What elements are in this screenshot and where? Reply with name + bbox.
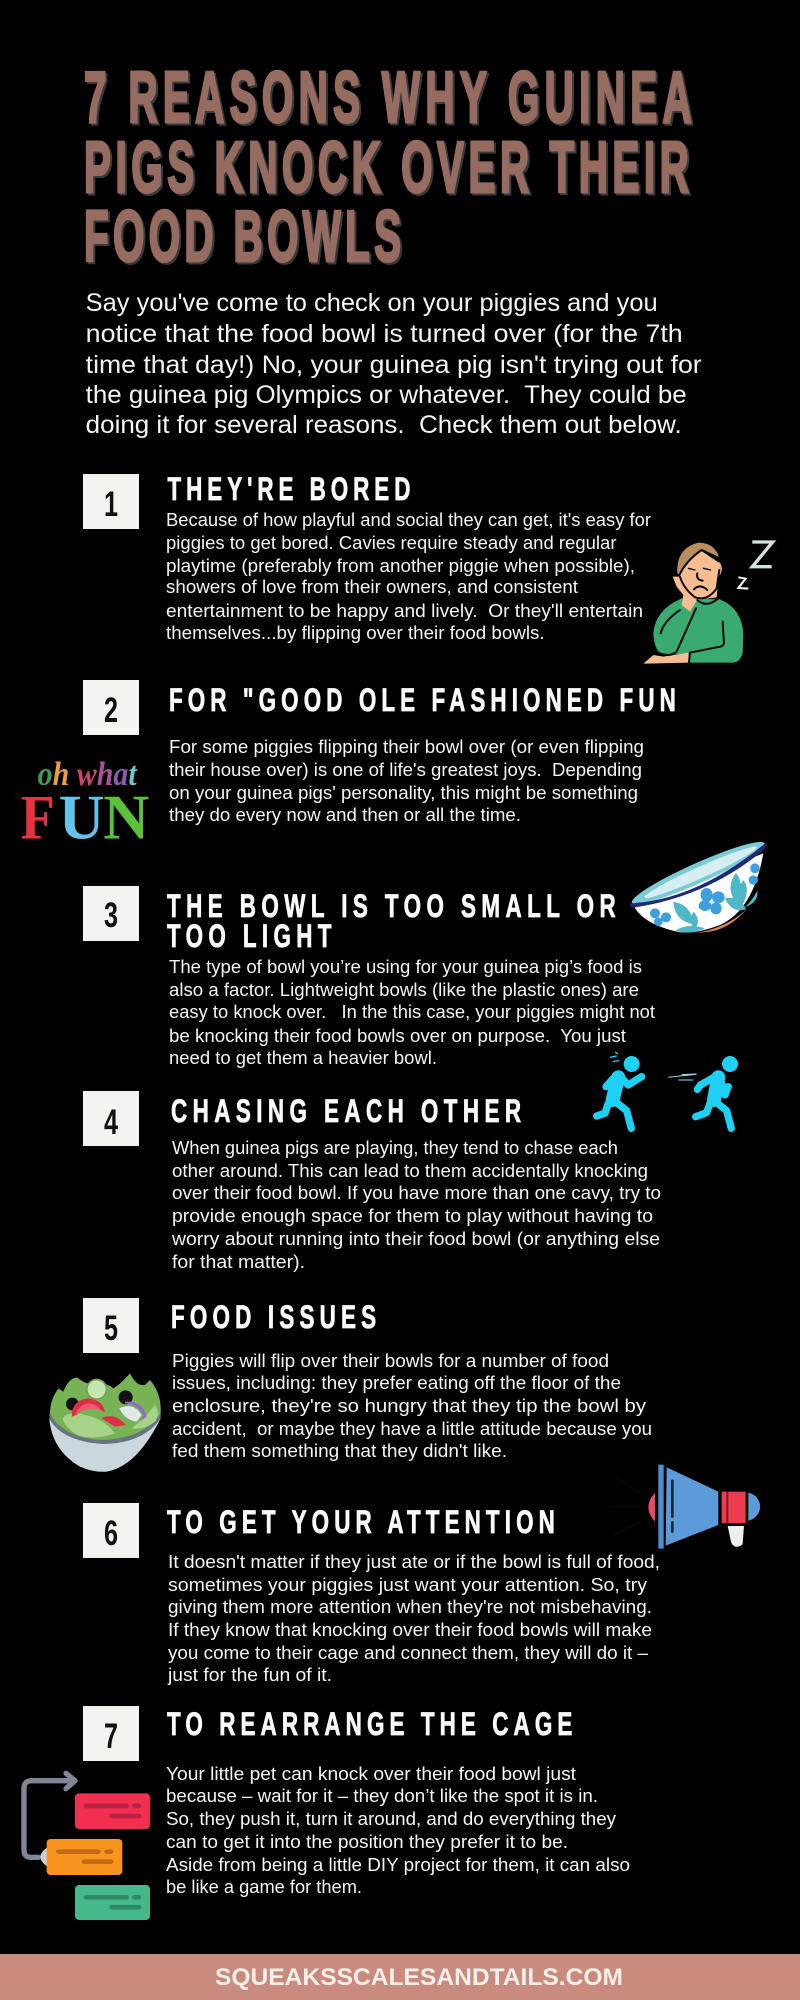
body text 6: If they know that knocking over their food bowls will make — [168, 1619, 652, 1640]
panel: reason 3 — [83, 834, 769, 1068]
panel: reason 7 — [24, 1706, 630, 1920]
number badge 4 — [83, 1091, 139, 1146]
number badge 1: 1 — [104, 485, 118, 524]
icon: oh what fun lettering: U — [59, 782, 105, 852]
body text 6: sometimes your piggies just want your attention. So, try — [168, 1574, 648, 1595]
body text 7: Your little pet can knock over their food bowl just — [166, 1763, 576, 1784]
icon: bored man — [643, 542, 773, 664]
body text 5 — [172, 1350, 652, 1461]
body text 6: It doesn't matter if they just ate or if the bowl is full of food, — [168, 1551, 660, 1572]
number badge 5: 5 — [104, 1309, 118, 1348]
panel: reason 4 — [83, 1052, 738, 1272]
intro text — [86, 289, 702, 439]
icon: salad bowl — [49, 1373, 161, 1472]
panel: reason 1 — [83, 471, 773, 664]
body text 4: worry about running into their food bowl (or anything else — [171, 1228, 660, 1249]
body text 5: fed them something that they didn't like. — [172, 1440, 507, 1461]
body text 7: can to get it into the position they prefer it to be. — [166, 1831, 568, 1852]
body text 3: easy to knock over. In the this case, your piggies might not — [169, 1001, 655, 1022]
number badge 7 — [83, 1706, 139, 1761]
title: PIGS KNOCK OVER THEIR — [84, 128, 689, 208]
title: FOOD BOWLS — [84, 197, 401, 277]
body text 5: Piggies will flip over their bowls for a number of food — [172, 1350, 609, 1371]
body text 1: piggies to get bored. Cavies require steady and regular — [166, 532, 616, 553]
number badge 2: 2 — [104, 691, 118, 730]
body text 1: Because of how playful and social they can get, it's easy for — [166, 509, 651, 530]
panel: reason 6 — [83, 1465, 760, 1685]
body text 3 — [169, 956, 655, 1068]
body text 6: just for the fun of it. — [167, 1664, 332, 1685]
intro text: doing it for several reasons. Check them out below. — [86, 411, 682, 439]
number badge 6: 6 — [104, 1514, 118, 1553]
body text 1: playtime (preferably from another piggie when possible), — [166, 555, 635, 576]
heading 4: CHASING EACH OTHER — [171, 1093, 521, 1129]
intro text: the guinea pig Olympics or whatever. They could be — [86, 381, 687, 409]
intro text: notice that the food bowl is turned over (for the 7th — [86, 320, 683, 348]
body text 7: So, they push it, turn it around, and do everything they — [166, 1808, 617, 1829]
icon: oh what fun lettering — [21, 756, 149, 852]
body text 4: provide enough space for them to play without having to — [172, 1205, 653, 1226]
icon: tilted patterned bowl — [628, 834, 769, 933]
body text 3: also a factor. Lightweight bowls (like the plastic ones) are — [169, 979, 639, 1000]
body text 1: themselves...by flipping over their food bowls. — [166, 622, 545, 643]
body text 7: because – wait for it – they don’t like the spot it is in. — [166, 1785, 598, 1806]
intro text: time that day!) No, your guinea pig isn't trying out for — [86, 351, 702, 379]
body text 4 — [171, 1137, 661, 1272]
body text 3: be knocking their food bowls over on purpose. You just — [169, 1025, 626, 1046]
heading 5: FOOD ISSUES — [171, 1299, 376, 1335]
body text 7 — [166, 1763, 630, 1897]
body text 2: on your guinea pigs' personality, this might be something — [169, 782, 638, 803]
number badge 4: 4 — [104, 1103, 118, 1142]
icon: oh what fun lettering: N — [103, 782, 149, 852]
body text 4: over their food bowl. If you have more than one cavy, try to — [172, 1182, 661, 1203]
body text 2: they do every now and then or all the time. — [169, 804, 521, 825]
icon: oh what fun lettering: F — [21, 782, 55, 852]
body text 5: accident, or maybe they have a little attitude because you — [172, 1418, 652, 1439]
number badge 6 — [83, 1503, 139, 1558]
icon: megaphone — [610, 1465, 760, 1549]
heading 2: FOR "GOOD OLE FASHIONED FUN — [169, 682, 676, 718]
body text 5: issues, including: they prefer eating off the floor of the — [172, 1372, 621, 1393]
panel: reason 5 — [49, 1298, 652, 1472]
footer banner: SQUEAKSSCALESANDTAILS.COM — [215, 1964, 623, 1991]
body text 3: need to get them a heavier bowl. — [169, 1047, 437, 1068]
heading 3: THE BOWL IS TOO SMALL OR — [167, 888, 616, 924]
body text 1 — [166, 509, 651, 643]
icon: oh what fun lettering: oh what — [38, 756, 138, 793]
heading 7: TO REARRANGE THE CAGE — [167, 1706, 572, 1742]
heading 3 — [167, 888, 616, 954]
body text 1: showers of love from their owners, and consistent — [166, 576, 578, 597]
body text 2 — [169, 736, 644, 825]
number badge 3: 3 — [104, 896, 118, 935]
body text 4: for that matter). — [172, 1251, 305, 1272]
heading 6: TO GET YOUR ATTENTION — [167, 1504, 555, 1540]
body text 3: The type of bowl you’re using for your guinea pig’s food is — [169, 956, 642, 977]
number badge 1 — [83, 474, 139, 529]
number badge 5 — [83, 1298, 139, 1353]
title — [84, 58, 692, 277]
body text 7: Aside from being a little DIY project for them, it can also — [166, 1854, 630, 1875]
body text 6: you come to their cage and connect them, they will do it – — [168, 1642, 649, 1663]
number badge 3 — [83, 886, 139, 941]
icon: rearranged cards with arrow — [24, 1773, 150, 1920]
body text 2: For some piggies flipping their bowl over (or even flipping — [169, 736, 644, 757]
body text 5: enclosure, they're so hungry that they tip the bowl by — [172, 1395, 647, 1416]
intro text: Say you've come to check on your piggies and you — [86, 289, 658, 317]
footer banner — [0, 1954, 800, 2000]
number badge 7: 7 — [104, 1717, 118, 1756]
title: 7 REASONS WHY GUINEA — [84, 58, 692, 138]
body text 7: be like a game for them. — [166, 1876, 362, 1897]
heading 3: TOO LIGHT — [167, 918, 332, 954]
body text 4: When guinea pigs are playing, they tend to chase each — [172, 1137, 618, 1158]
body text 6 — [167, 1551, 660, 1685]
icon: two running figures — [597, 1052, 738, 1128]
heading 1: THEY'RE BORED — [168, 471, 410, 507]
body text 6: giving them more attention when they're not misbehaving. — [168, 1596, 652, 1617]
body text 4: other around. This can lead to them accidentally knocking — [172, 1160, 648, 1181]
body text 2: their house over) is one of life's greatest joys. Depending — [169, 759, 642, 780]
number badge 2 — [83, 680, 139, 735]
panel: reason 2 — [21, 680, 676, 852]
body text 1: entertainment to be happy and lively. Or they'll entertain — [166, 600, 643, 621]
